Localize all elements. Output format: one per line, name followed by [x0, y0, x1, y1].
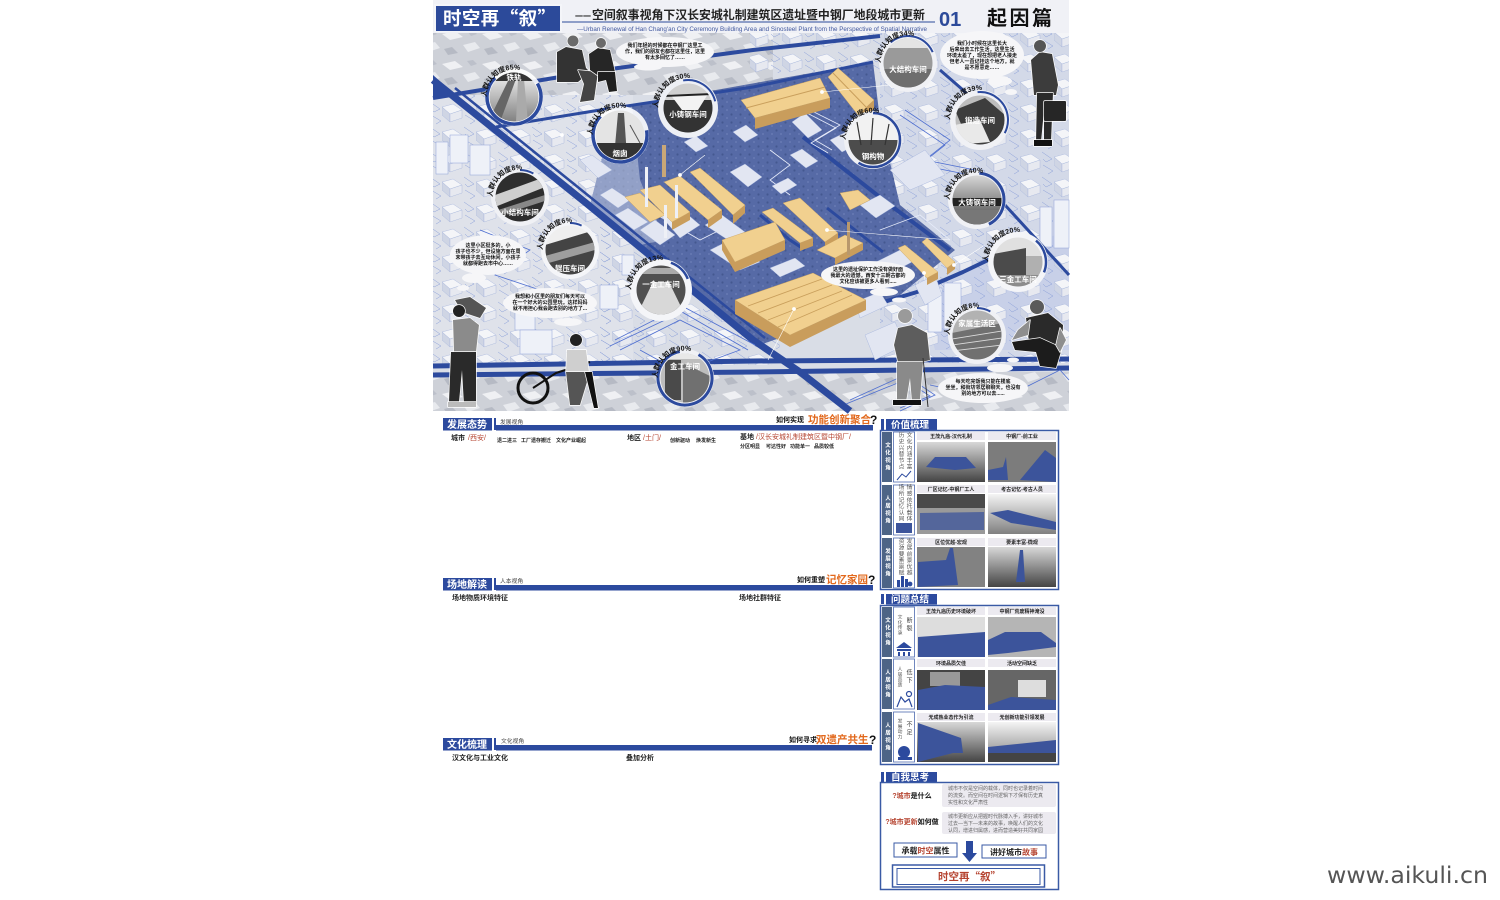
- photo circle: 钢构物: [840, 108, 902, 169]
- white factory blocks: [580, 113, 945, 360]
- row: 不足: 不足: [905, 721, 912, 737]
- photo circle: 锻造车间: [944, 85, 1010, 150]
- photo circle: 金工车间: 金工车间: [670, 361, 700, 371]
- photo circle: 锻造车间: 人群认知度39%: [944, 85, 982, 120]
- panel: 自我思考: 自我思考: [891, 772, 929, 784]
- photo circle: 辊压车间: 人群认知度6%: [536, 218, 572, 250]
- speech bubble: 男孩: [503, 288, 597, 326]
- arrow: [962, 841, 977, 862]
- speech bubble: 男孩: 在一个好大的公园里玩，这样妈妈: [512, 299, 588, 306]
- photo circle: 金工车间: 人群认知度90%: [652, 346, 691, 378]
- speech bubble: 老工人: 有太多回忆了……: [645, 54, 685, 61]
- text block: 地区: 焕发新生: [696, 437, 716, 444]
- speech bubble: 商务人士: 是不愿意走……: [964, 64, 1000, 71]
- speech bubble: 商务人士: [940, 31, 1024, 95]
- person: two seated old men: [557, 36, 617, 102]
- speech bubble: 老工人: 作，我们的朋友也都在这里住，这里: [625, 48, 705, 55]
- speech bubble: 居民: 别的地方可以去......: [961, 390, 1005, 397]
- row: 断裂: 文化传承: [896, 613, 902, 636]
- photo circle: 一金工车间: 一金工车间: [642, 279, 680, 289]
- photo circle: 大结构车间: 人群认知度34%: [874, 30, 914, 63]
- row: 发展视角: [882, 537, 1056, 588]
- photo circle: 烟囱: [586, 102, 649, 164]
- row: 发展视角: 要素丰富-微观: [1006, 539, 1038, 546]
- section: 场地解读: 场地社群特征: [739, 593, 781, 602]
- box: 承载时空属性: 承载时空属性: [902, 846, 950, 856]
- text block: 地区: [627, 433, 716, 444]
- photo circle: 一金工车间: [625, 255, 692, 321]
- section: 文化梳理: ?: [869, 733, 876, 747]
- subtitle: 空间叙事视角下汉长安城礼制建筑区遗址暨中钢厂地段城市更新: [592, 8, 925, 22]
- photo circle: 大结构车间: 大结构车间: [889, 64, 927, 74]
- text block: 城市: 工厂遗存搬迁: [521, 437, 551, 444]
- row: 低下: 环境品质欠佳: [936, 660, 966, 667]
- section: 发展态势: 功能创新聚合: [808, 413, 871, 426]
- speech bubble: 居民: [938, 358, 1028, 403]
- section: 发展态势: 如何实现: [776, 415, 804, 424]
- section: 场地解读: 场地解读: [447, 578, 487, 591]
- row: 人居视角: 人居视角: [884, 495, 891, 525]
- text block: 基地: /汉长安城礼制建筑区暨中钢厂/: [756, 432, 851, 441]
- text block: 基地: 可达性好: [766, 443, 786, 450]
- panel: 问题总结: [880, 594, 1058, 764]
- row: 断裂: 中钢厂荒废精神淹没: [999, 608, 1045, 615]
- photo circle: 钢构物: 人群认知度60%: [840, 108, 879, 140]
- speech bubble: 老工人: 我们年轻的时候都在中钢厂这里工: [627, 42, 703, 49]
- row: 人居视角: 厂区记忆-中钢厂工人: [928, 486, 974, 493]
- photo circle: 小结构车间: 人群认知度8%: [486, 164, 522, 197]
- row: 不足: 无创新功能引领发展: [999, 714, 1045, 721]
- section number 01: 01: [939, 9, 961, 31]
- answer 2: 认同，增进归属感，进而营造美好共同家园: [948, 827, 1043, 834]
- row: 低下: 活动空间缺乏: [1007, 660, 1037, 667]
- text block: 地区: 创新驱动: [670, 437, 690, 444]
- section: 发展态势: 发展态势: [447, 418, 487, 431]
- speech bubble: 男孩: 我想和小区里的朋友们每天可以: [515, 293, 585, 300]
- row: 人居视角: 考古记忆-考古人员: [1001, 486, 1043, 493]
- section: 发展态势: [443, 413, 877, 450]
- photo circle: 小铸钢车间: [652, 73, 718, 138]
- header band: [433, 0, 1069, 33]
- section: 场地解读: [443, 573, 875, 602]
- photo circle: 辊压车间: 辊压车间: [555, 263, 585, 273]
- subtitle: —Urban Renewal of Han Chang'an City Ceremony Building Area and Sinosteel Plant from the Perspective of Spatial Narrative: [577, 26, 927, 33]
- box: 承载时空属性: [894, 843, 957, 857]
- row: 文化视角: 中钢厂-前工业: [1006, 433, 1038, 440]
- section: 发展态势: 发展视角: [500, 418, 523, 426]
- speech bubble: 商务人士: 环境太差了，现在想把老人接走: [947, 52, 1017, 59]
- section: 文化梳理: [443, 733, 876, 762]
- photo circle: 铁轨: [480, 64, 543, 126]
- row: 文化视角: 王茂九庙-汉代礼制: [930, 433, 972, 440]
- photo: 宏观: [917, 547, 985, 587]
- answer 1: 城市不仅是空间的载体，同时也记录着时间: [948, 785, 1043, 792]
- text block: 城市: /西安/: [468, 433, 486, 442]
- speech bubble: 父亲: [450, 235, 526, 291]
- row: 人居视角: 场所记忆认同: [897, 483, 904, 523]
- photo circle: 烟囱: 人群认知度50%: [586, 102, 626, 135]
- speech bubble: 商务人士: 我们小时候在这里长大: [957, 40, 1007, 47]
- section: 场地解读: 场地物质环境特征: [452, 593, 508, 602]
- person: squatting man: [1012, 300, 1066, 368]
- question 2: ?城市更新如何做: [885, 817, 939, 826]
- text block: 城市: 文化产业崛起: [556, 437, 586, 444]
- photo: 活动空间: [988, 670, 1056, 710]
- photo: 环境品质: [917, 670, 985, 710]
- speech bubble: 老工人: [616, 37, 714, 70]
- watermark: www.aikuli.cn: [1327, 863, 1488, 889]
- section: 文化梳理: 汉文化与工业文化: [452, 753, 508, 762]
- row: 不足: 无成熟业态作为引流: [928, 714, 974, 721]
- photo circle: 大铸钢车间: 大铸钢车间: [958, 197, 996, 207]
- person: old man with cane: [893, 309, 930, 407]
- photo: 创新功能: [988, 722, 1056, 762]
- section: 文化梳理: 文化视角: [501, 737, 524, 745]
- speech bubble: 老人遗址: [821, 261, 915, 302]
- row: 人居视角: [882, 483, 1056, 535]
- text block: 地区: /土门/: [643, 433, 661, 442]
- pipes and paths: [480, 110, 1069, 411]
- photo circle: 锻造车间: 锻造车间: [965, 115, 995, 125]
- photo circle: 铁轨: 人群认知度85%: [480, 64, 520, 97]
- panel: 价值梳理: [880, 419, 1058, 590]
- title block: 时空再“叙”: [443, 5, 556, 31]
- subtitle: 一一: [575, 12, 591, 21]
- question 1: ?城市是什么: [892, 791, 932, 800]
- section: 场地解读: 记忆家园: [826, 573, 868, 586]
- speech bubble: 商务人士: 后来出去工作生活，这里生活: [949, 46, 1015, 53]
- text block: 地区: 地区: [627, 433, 641, 442]
- photo circle: 三金工车间: [982, 227, 1048, 292]
- photo circle: 家属生活区: 家属生活区: [958, 318, 996, 328]
- row: 低下: 人居品质: [896, 666, 902, 689]
- photo circle: 小铸钢车间: 小铸钢车间: [669, 109, 707, 119]
- photo: 微观: [988, 547, 1056, 587]
- photo circle: 一金工车间: 人群认知度13%: [625, 255, 663, 290]
- row: 不足: 人居视角: [884, 722, 891, 752]
- section: 文化梳理: 叠加分析: [626, 753, 654, 762]
- photo circle: 铁轨: 铁轨: [506, 72, 522, 82]
- section: 场地解读: 如何重塑: [797, 575, 825, 584]
- high-rise slabs: [436, 135, 1069, 354]
- photo: 中钢厂: [988, 442, 1056, 482]
- section: 文化梳理: 双遗产共生: [816, 733, 869, 746]
- box: 时空再叙: [892, 865, 1044, 887]
- photo: 九庙环境: [917, 617, 985, 657]
- photo circle: 家属生活区: [944, 302, 1006, 364]
- speech bubble: 父亲: 就都得跑去市中心……: [463, 260, 513, 267]
- row: 文化视角: 历史兴替节点: [897, 432, 904, 471]
- panel: 自我思考: [880, 772, 1058, 890]
- photo circle: 金工车间: [652, 346, 714, 407]
- answer 1: [942, 784, 1056, 807]
- photo: 荒废厂房: [988, 617, 1056, 657]
- photo circle: 辊压车间: [536, 218, 599, 279]
- photo: 考古人员: [988, 494, 1056, 534]
- row: 文化视角: [882, 431, 1056, 482]
- row: 文化视角: 文化内涵丰富: [905, 431, 912, 471]
- speech bubble: 男孩: 就不用担心我会跑去别的地方了...: [513, 305, 588, 312]
- photo circle: 三金工车间: 三金工车间: [999, 274, 1037, 284]
- row: 文化视角: 文化视角: [884, 441, 891, 472]
- text block: 城市: [451, 433, 586, 444]
- photo circle: 小铸钢车间: 人群认知度30%: [652, 73, 690, 108]
- photo: 王莽九庙: [917, 442, 985, 482]
- photo: 工人合影: [917, 494, 985, 534]
- photo circle: 大铸钢车间: [944, 168, 1006, 229]
- photo circle: 小结构车间: 小结构车间: [501, 207, 539, 217]
- panel: 问题总结: 问题总结: [891, 594, 930, 606]
- speech bubble: 居民: 坐坐，和街坊邻居聊聊天，也没有: [945, 384, 1021, 391]
- row: 不足: [882, 712, 1056, 762]
- speech bubble: 老人遗址: 这里的遗址保护工作没有做好面: [833, 266, 903, 273]
- row: 断裂: 文化视角: [884, 616, 891, 647]
- speech bubble: 父亲: 孩子也不少，但设施方面在周: [455, 248, 521, 255]
- text block: 基地: 功能单一: [790, 443, 810, 450]
- box: 讲好城市故事: 讲好城市故事: [990, 847, 1038, 857]
- answer 1: 的流变。而空间在时间逻辑下才保有历史真: [948, 792, 1043, 799]
- answer 2: 城市更新应从把握时代脉搏入手，讲好城市: [948, 813, 1043, 820]
- section: 文化梳理: 文化梳理: [447, 738, 487, 751]
- section: 场地解读: 人本视角: [500, 577, 523, 585]
- answer 1: 实性和文化严肃性: [948, 799, 988, 806]
- photo circle: 三金工车间: 人群认知度20%: [982, 227, 1020, 262]
- person: boy with bicycle: [518, 334, 598, 408]
- subtitle: [562, 8, 935, 33]
- box: 讲好城市故事: [982, 845, 1046, 858]
- person: father lifting child: [448, 297, 486, 407]
- photo circle: 钢构物: 钢构物: [862, 151, 885, 161]
- speech bubble: 老人遗址: 我最大的遗憾，西安十三朝古都的: [830, 272, 906, 279]
- answer 2: [942, 812, 1056, 834]
- text block: 城市: 退二进三: [497, 437, 517, 444]
- row: 低下: [882, 659, 1056, 710]
- leader lines: [560, 85, 985, 360]
- row: 断裂: 王茂九庙历史环境破坏: [926, 608, 976, 615]
- row: 断裂: [882, 607, 1056, 657]
- text block: 城市: 城市: [451, 433, 465, 442]
- answer 2: 过去—当下—未来的故事，唤醒人们的文化: [948, 820, 1043, 827]
- text block: 基地: 分区明显: [740, 443, 760, 450]
- chimneys: [645, 145, 850, 255]
- row: 发展视角: 发展前景优越: [905, 537, 912, 577]
- row: 不足: 发展动力: [896, 717, 902, 741]
- panel: axonometric site map: [433, 0, 1069, 411]
- photo circle: 小结构车间: [486, 164, 549, 226]
- chapter title: 起因篇: [987, 2, 1054, 31]
- row: 断裂: 断裂: [905, 617, 912, 633]
- row: 低下: 低下: [905, 669, 912, 685]
- speech bubble: 老人遗址: 文化应该被更多人看到.....: [840, 278, 897, 285]
- photo: 业态: [917, 722, 985, 762]
- row: 发展视角: 发展视角: [884, 547, 891, 578]
- section: 场地解读: ?: [868, 573, 875, 587]
- photo circle: 大铸钢车间: 人群认知度40%: [944, 168, 983, 200]
- row: 发展视角: 资源要素禀赋: [897, 537, 904, 577]
- text block: 基地: [740, 432, 851, 450]
- speech bubble: 父亲: 末带孩子去互动休闲，小孩子: [455, 254, 521, 261]
- text block: 基地: 品质较低: [814, 443, 834, 450]
- photo circle: 大结构车间: [874, 30, 937, 92]
- roads: [433, 36, 1069, 411]
- yellow heritage buildings: [625, 68, 955, 347]
- text block: 基地: 基地: [740, 432, 754, 441]
- section: 发展态势: ?: [870, 413, 877, 427]
- row: 发展视角: 区位优越-宏观: [935, 539, 967, 546]
- speech bubble: 居民: 每天吃完饭我只能在楼底: [955, 378, 1011, 385]
- box: 时空再叙: 时空再“叙”: [938, 869, 1001, 884]
- section: 文化梳理: 如何寻求: [789, 735, 817, 744]
- photo circle: 烟囱: 烟囱: [612, 148, 628, 158]
- row: 人居视角: 情感依托载体: [905, 483, 912, 523]
- panel: 价值梳理: 价值梳理: [891, 419, 930, 431]
- speech bubble: 商务人士: 但老人一直记挂这个地方，就: [949, 58, 1015, 65]
- speech bubble: 父亲: 这里小区挺多的，小: [465, 242, 511, 249]
- photo circle: 家属生活区: 人群认知度8%: [944, 302, 979, 335]
- person: businessman with briefcase: [1031, 40, 1066, 146]
- row: 低下: 人居视角: [884, 669, 891, 699]
